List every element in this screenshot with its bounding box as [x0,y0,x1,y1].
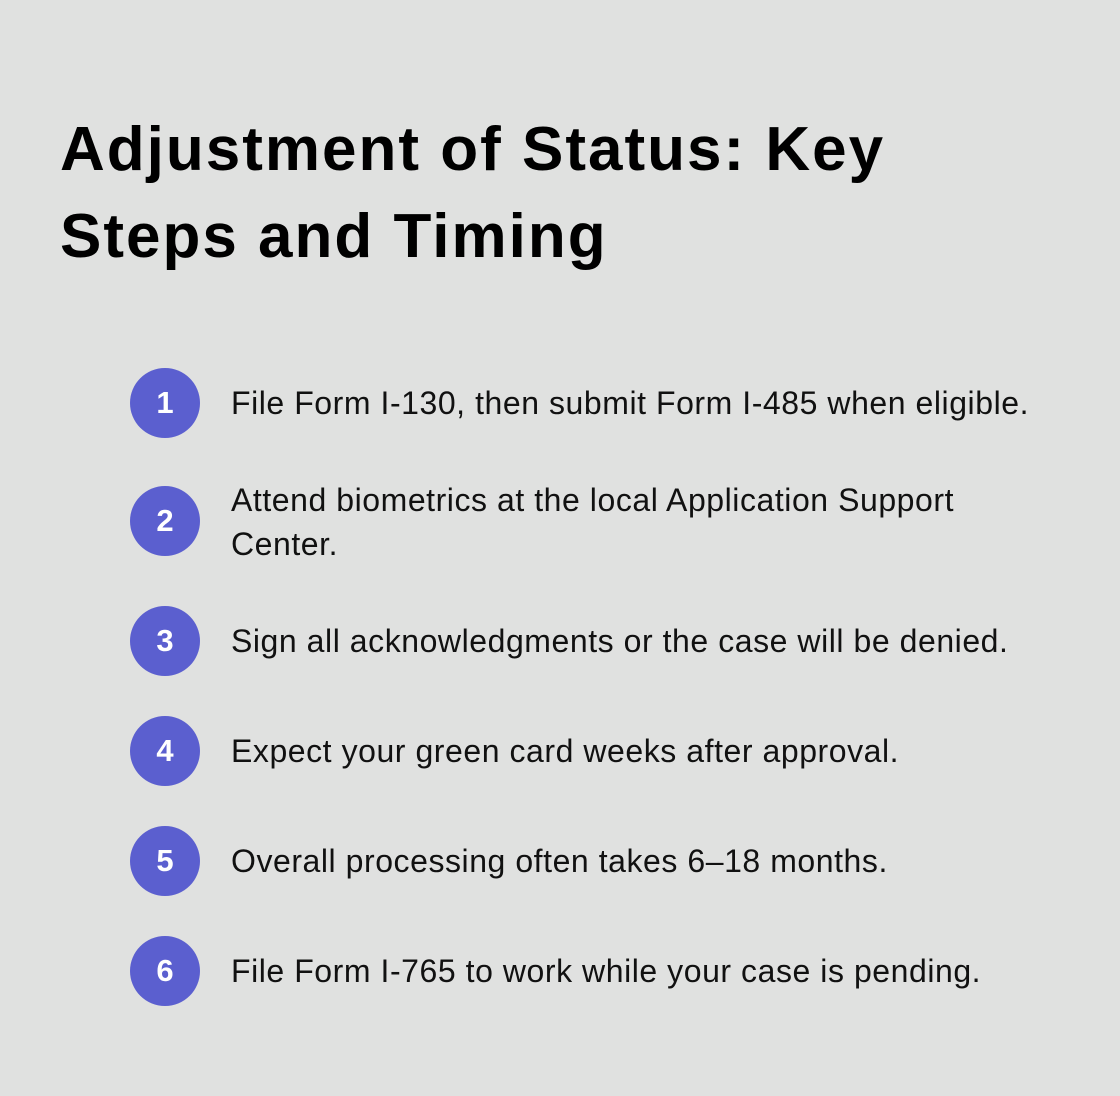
icon: number 6: 6 [156,953,174,988]
icon: number 4: 4 [156,733,174,768]
text: step 1: File Form I-130, then submit Form I-485 when eligible. [231,385,1029,421]
icon: number 5: 5 [156,843,174,878]
step 1 [130,368,1029,438]
icon: number 5 [130,826,200,896]
text: step 4: Expect your green card weeks after approval. [231,733,899,769]
step 2 [130,482,954,562]
icon: number 2 [130,486,200,556]
text: step 2: Attend biometrics at the local Application Support [231,482,954,518]
text: step 3: Sign all acknowledgments or the case will be denied. [231,623,1008,659]
title: Adjustment of Status: Key [60,115,885,184]
icon: number 1: 1 [156,385,174,420]
step 6 [130,936,981,1006]
step 3 [130,606,1008,676]
text: step 5: Overall processing often takes 6–18 months. [231,843,888,879]
icon: number 1 [130,368,200,438]
icon: number 3: 3 [156,623,174,658]
text: step 2: Center. [231,526,338,562]
icon: number 2: 2 [156,503,174,538]
icon: number 6 [130,936,200,1006]
step 5 [130,826,888,896]
text: step 6: File Form I-765 to work while your case is pending. [231,953,981,989]
icon: number 3 [130,606,200,676]
icon: number 4 [130,716,200,786]
title [60,115,885,271]
title: Steps and Timing [60,202,608,271]
step 4 [130,716,899,786]
text: step 2 [231,482,954,562]
